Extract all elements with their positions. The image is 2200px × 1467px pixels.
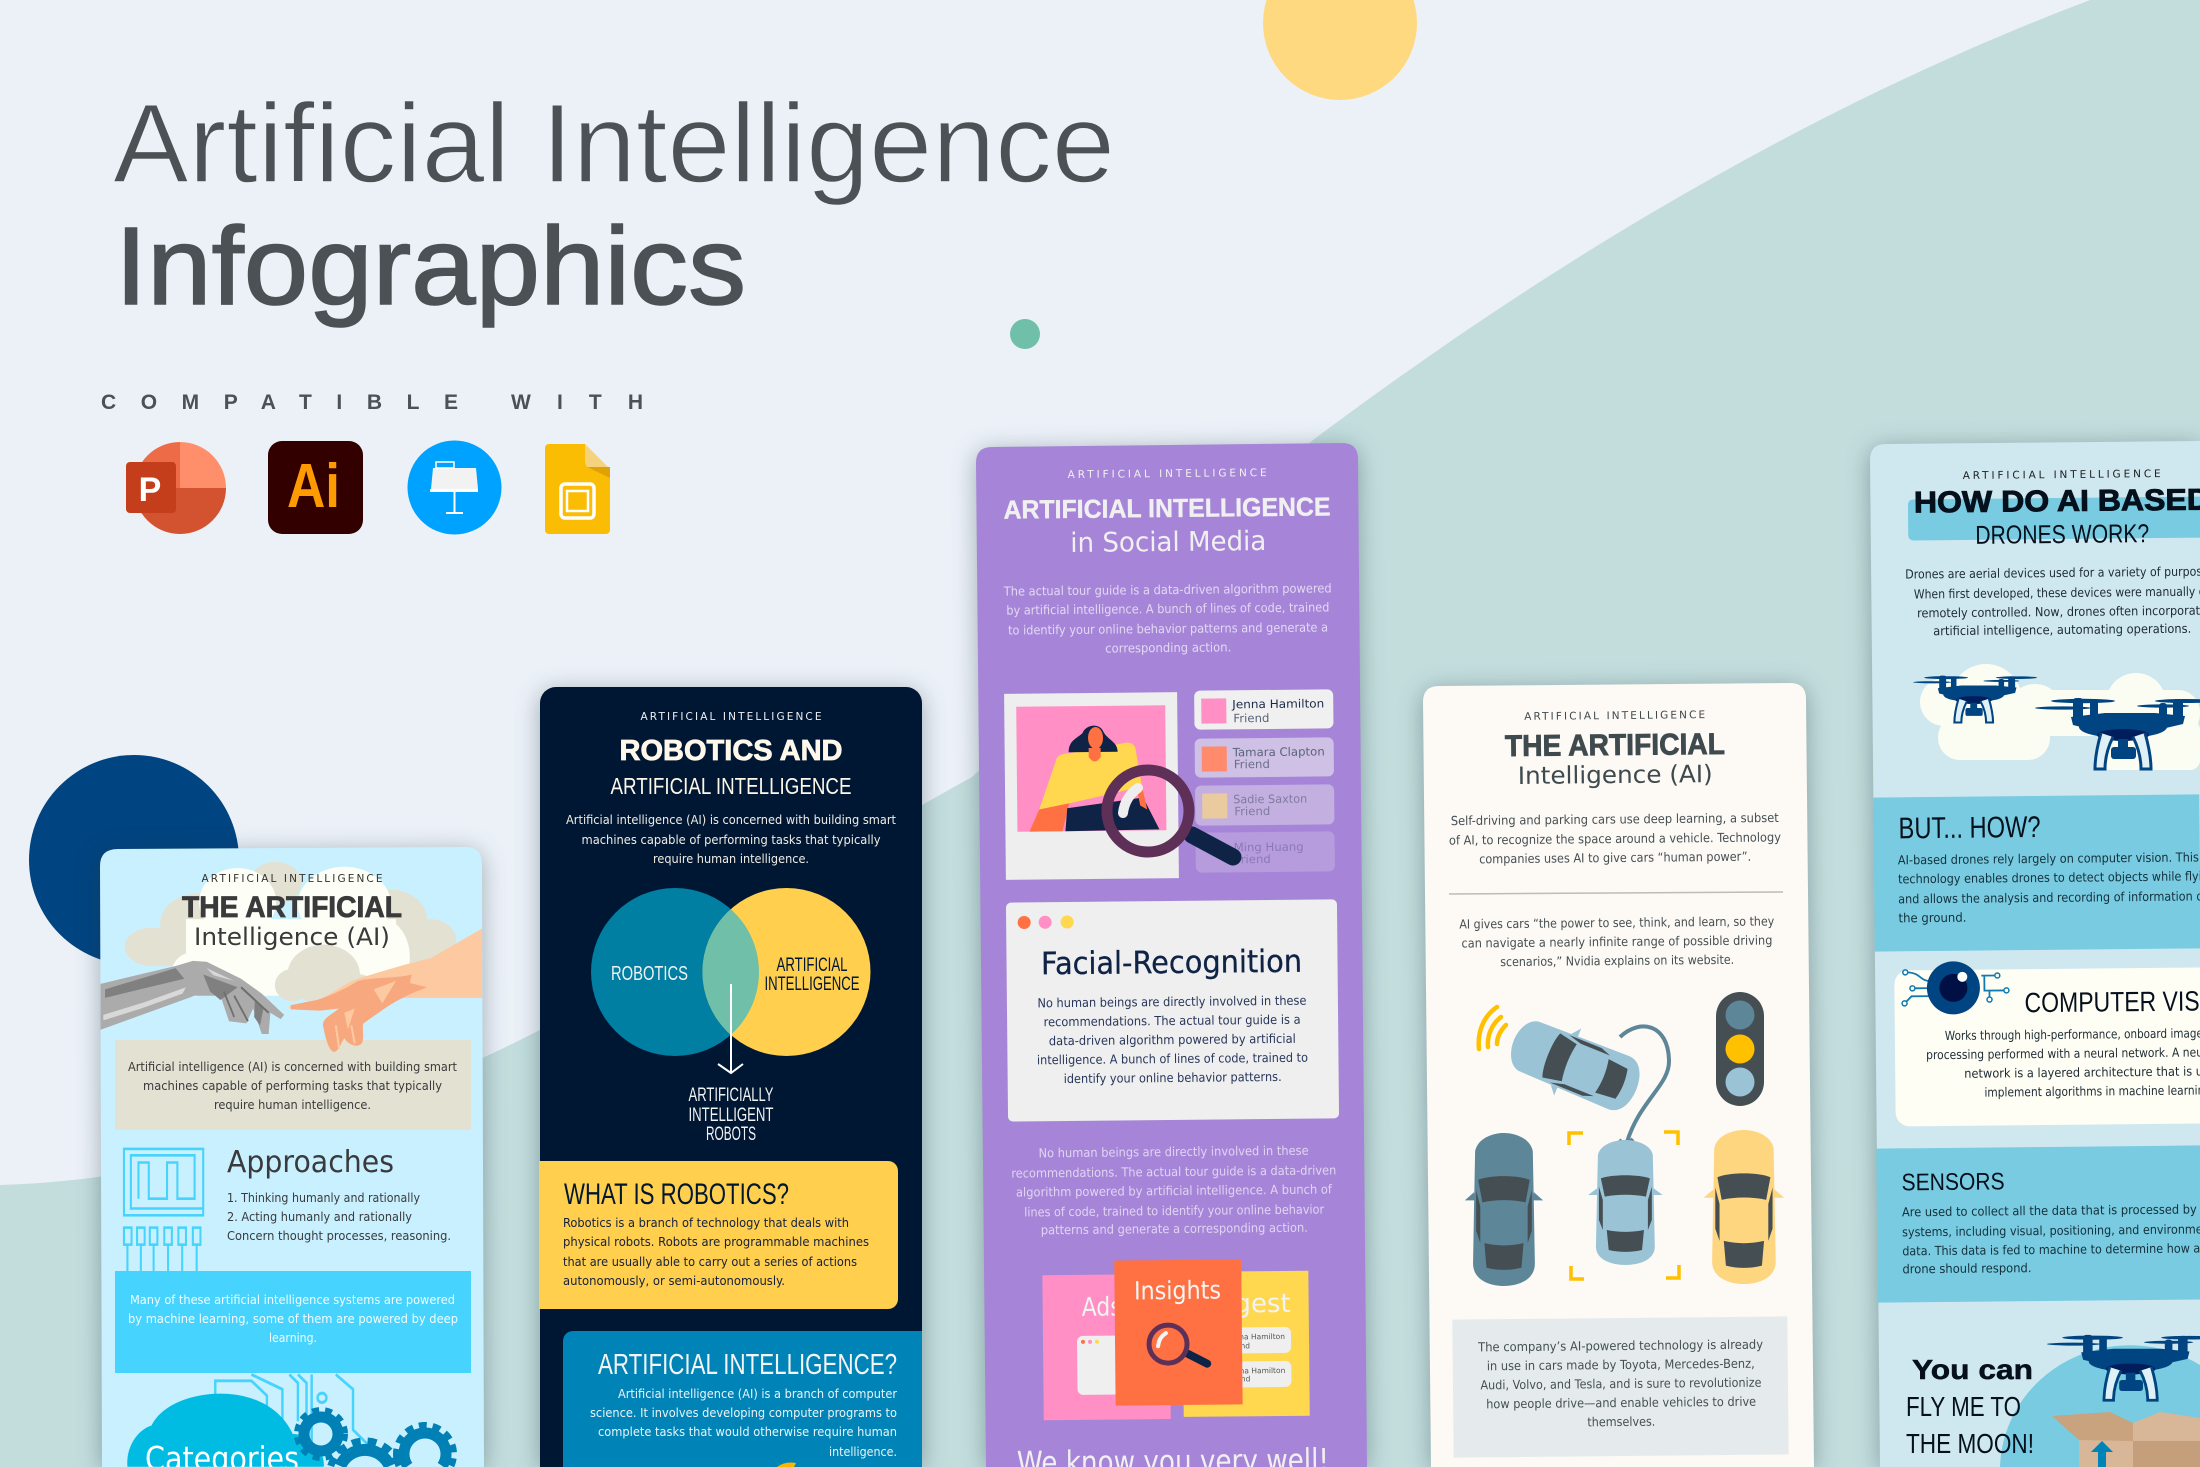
yellow box: what is robotics: [539, 1161, 898, 1309]
venn result label: [688, 1085, 774, 1145]
info box: in use in cars made by Toyota, Mercedes-Benz,: [1487, 1356, 1755, 1373]
facial recognition window: intelligence. A bunch of lines of code, trained to: [1037, 1050, 1308, 1067]
parking brackets: [1569, 1132, 1679, 1279]
header: [1003, 466, 1331, 560]
title: [113, 81, 1115, 328]
intro paragraph: require human intelligence.: [653, 851, 809, 866]
heading: ROBOTICS AND: [620, 735, 842, 767]
second paragraph: [1011, 1142, 1337, 1238]
compatible with label: COMPATIBLE: [101, 391, 458, 414]
blue callout: by machine learning, some of them are powered by deep: [128, 1311, 458, 1326]
second paragraph: can navigate a nearly infinite range of possible driving: [1461, 932, 1773, 951]
band: but how: the ground.: [1898, 910, 1967, 925]
second paragraph: algorithm powered by artificial intelligence. A bunch of: [1016, 1181, 1333, 1200]
approaches list: 1. Thinking humanly and rationally: [227, 1190, 421, 1205]
card: suggest: Suggest: [1185, 1289, 1291, 1320]
venn result label: ROBOTS: [706, 1124, 756, 1145]
venn diagram: ROBOTICS: [611, 963, 688, 985]
friend row: Ming Huang: Friend: [1235, 852, 1271, 866]
intro paragraph: [1003, 580, 1332, 657]
curved arrow: [1619, 1026, 1669, 1146]
intro paragraph: [566, 812, 896, 866]
band: but how: [1873, 794, 2200, 952]
title: Infographics: [115, 205, 746, 328]
info box: [1452, 1316, 1789, 1458]
blue box: artificial intelligence: complete tasks that would otherwise require human: [598, 1424, 897, 1439]
icon: Illustrator: [268, 441, 363, 534]
facial recognition window: recommendations. The actual tour guide is a: [1044, 1012, 1301, 1029]
blue box: artificial intelligence: [563, 1331, 922, 1467]
blue callout: [115, 1271, 471, 1373]
illustration: photo card: [1004, 692, 1179, 880]
card: suggest: [1182, 1271, 1310, 1417]
icon: Illustrator: Ai: [287, 452, 340, 521]
panel: the artificial intelligence (hands): [100, 847, 484, 1467]
header: ARTIFICIAL INTELLIGENCE: [1524, 709, 1705, 723]
eyebrow: ARTIFICIAL INTELLIGENCE: [640, 711, 822, 723]
header: [1505, 709, 1725, 790]
blue callout: Many of these artificial intelligence systems are powered: [130, 1292, 455, 1307]
decoration: green dot: [1010, 319, 1040, 349]
bottom section blue blob: [2000, 1345, 2200, 1467]
compatible with label: WITH: [511, 391, 643, 414]
header: [1908, 468, 2200, 551]
friend row: Sadie Saxton: Friend: [1234, 804, 1270, 818]
header: HOW DO AI BASED: [1914, 484, 2200, 519]
illustration: yellow car: [1704, 1130, 1784, 1284]
intro paragraph: The actual tour guide is a data-driven algorithm powered: [1003, 580, 1332, 599]
yellow box: what is robotics: physical robots. Robots are programmable machines: [563, 1234, 869, 1249]
icon: PowerPoint: P: [139, 471, 161, 509]
friend row: Jenna Hamilton: [1194, 689, 1333, 730]
closing text: FLY ME TO: [1906, 1391, 2021, 1422]
facial recognition window: [1006, 899, 1339, 1122]
description box: require human intelligence.: [214, 1097, 371, 1112]
info box: Audi, Volvo, and Tesla, and is sure to revolutionize: [1480, 1375, 1762, 1392]
eyebrow: ARTIFICIAL INTELLIGENCE: [202, 873, 382, 885]
friend row: Tamara Clapton: Tamara Clapton: [1232, 744, 1325, 759]
intro paragraph: [1905, 563, 2200, 639]
heading: [610, 735, 852, 799]
yellow box: what is robotics: that are usually able to carry out a series of actions: [563, 1254, 857, 1269]
second paragraph: [1459, 913, 1775, 970]
description box: Artificial intelligence (AI) is concerned with building smart: [128, 1059, 457, 1074]
decoration: yellow circle: [1263, 0, 1417, 100]
blue box: artificial intelligence: intelligence.: [829, 1444, 897, 1459]
panel: artificial intelligence in social media: [976, 443, 1367, 1467]
second paragraph: lines of code, trained to identify your online behavior: [1024, 1202, 1325, 1219]
facial recognition window: identify your online behavior patterns.: [1064, 1069, 1282, 1086]
compatible with label: [101, 391, 643, 414]
venn result label: ARTIFICIALLY: [688, 1085, 774, 1106]
approaches list: 2. Acting humanly and rationally: [227, 1209, 413, 1224]
intro paragraph: of AI, to recognize the space around a vehicle. Technology: [1449, 829, 1782, 848]
friend row: Tamara Clapton: [1195, 737, 1334, 778]
band: sensors: drone should respond.: [1902, 1260, 2032, 1276]
closing text: You can: [1912, 1354, 2033, 1385]
approaches heading: Approaches: [227, 1145, 394, 1180]
heading: ARTIFICIAL INTELLIGENCE: [610, 773, 852, 799]
info box: The company’s AI-powered technology is already: [1477, 1337, 1764, 1354]
friend rows: [1194, 689, 1335, 873]
venn diagram: [591, 888, 870, 1056]
illustration: clouds: [1920, 664, 2200, 770]
intro paragraph: to identify your online behavior patterns and generate a: [1008, 619, 1328, 638]
approaches list: Concern thought processes, reasoning.: [227, 1228, 451, 1243]
facial recognition window: Facial-Recognition: [1041, 944, 1302, 982]
description box: machines capable of performing tasks that typically: [143, 1078, 443, 1093]
heading: THE ARTIFICIAL: [182, 891, 402, 924]
illustration: clouds: [125, 862, 456, 1004]
friend row: Tamara Clapton: Friend: [1234, 757, 1270, 771]
header: Intelligence (AI): [1518, 760, 1713, 790]
white box: computer vision: [1894, 959, 2200, 1126]
intro paragraph: machines capable of performing tasks that typically: [582, 832, 881, 847]
illustration: circuits: [215, 1374, 379, 1465]
venn diagram: INTELLIGENCE: [764, 974, 860, 995]
blue box: artificial intelligence: ARTIFICIAL INTELLIGENCE?: [598, 1349, 897, 1381]
intro paragraph: companies uses AI to give cars “human power”.: [1479, 849, 1751, 866]
intro paragraph: Self-driving and parking cars use deep learning, a subset: [1451, 810, 1779, 828]
illustration: large drone: [2035, 698, 2200, 769]
second paragraph: scenarios,” Nvidia explains on its website.: [1500, 952, 1734, 969]
illustration: parked blue car: [1588, 1140, 1663, 1265]
icon: circuit chip: [124, 1149, 203, 1271]
illustration: package box: [2052, 1412, 2200, 1467]
card: suggest: Friend: [1227, 1374, 1251, 1384]
header: ARTIFICIAL INTELLIGENCE: [1003, 491, 1331, 525]
header: THE ARTIFICIAL: [1505, 728, 1725, 763]
icon: circuit eye: [1902, 961, 2009, 1015]
icon: Keynote: [408, 440, 502, 534]
arrow: [718, 984, 743, 1073]
friend row: Jenna Hamilton: Friend: [1233, 711, 1269, 725]
panel: how do AI based drones work: [1870, 441, 2200, 1467]
band: sensors: [1876, 1145, 2200, 1303]
friend row: Jenna Hamilton: Jenna Hamilton: [1231, 696, 1324, 711]
yellow box: what is robotics: autonomously, or semi-autonomously.: [563, 1273, 785, 1288]
header: ARTIFICIAL INTELLIGENCE: [1963, 468, 2161, 482]
illustration: small drone: [1913, 676, 2037, 723]
decoration: navy circle: [29, 755, 239, 965]
card: insights: Insights: [1134, 1276, 1221, 1305]
illustration: blue cloud: [127, 1394, 324, 1467]
intro paragraph: by artificial intelligence. A bunch of lines of code, trained: [1006, 599, 1329, 618]
header: DRONES WORK?: [1975, 518, 2149, 550]
friend row: Sadie Saxton: Sadie Saxton: [1233, 792, 1307, 806]
facial recognition window: data-driven algorithm powered by artificial: [1049, 1031, 1296, 1048]
description box: [115, 1040, 471, 1130]
friend row: Sadie Saxton: [1195, 784, 1334, 826]
facial recognition window: No human beings are directly involved in these: [1037, 993, 1307, 1010]
card: ads: [1042, 1274, 1171, 1420]
illustration: robot arm: [101, 961, 284, 1034]
blue box: artificial intelligence: Artificial intelligence (AI) is a branch of computer: [618, 1386, 898, 1401]
icon: magnifying glass: [1107, 770, 1233, 857]
header: in Social Media: [1070, 526, 1266, 559]
second paragraph: No human beings are directly involved in these: [1039, 1143, 1309, 1160]
icon: gears: [297, 1410, 454, 1466]
yellow box: what is robotics: Robotics is a branch of technology that deals with: [563, 1215, 849, 1230]
icon: PowerPoint: [126, 442, 226, 534]
icon: signal arcs: [1479, 1007, 1506, 1049]
info box: themselves.: [1587, 1414, 1655, 1429]
intro paragraph: corresponding action.: [1105, 639, 1231, 656]
closing text: THE MOON!: [1906, 1428, 2034, 1459]
panel: the artificial intelligence (cars): [1423, 683, 1814, 1467]
info box: how people drive—and enable vehicles to drive: [1486, 1394, 1756, 1411]
heading: [182, 891, 402, 951]
header: ARTIFICIAL INTELLIGENCE: [1068, 467, 1267, 481]
intro paragraph: [1449, 810, 1782, 867]
illustration: moving car: [1500, 1007, 1650, 1123]
approaches list: [227, 1190, 451, 1243]
blue box: artificial intelligence: science. It involves developing computer programs to: [590, 1405, 897, 1420]
illustration: delivery drone: [2047, 1335, 2200, 1400]
cards: ads, suggest, insights: [1042, 1259, 1310, 1420]
panel: robotics and artificial intelligence: [539, 687, 922, 1467]
blue callout: learning.: [269, 1330, 317, 1345]
intro paragraph: Artificial intelligence (AI) is concerned with building smart: [566, 812, 896, 827]
card: ads: Ads: [1082, 1293, 1122, 1323]
title: Artificial Intelligence: [113, 81, 1115, 206]
icon: Google Slides: [545, 444, 610, 534]
closing text: [1906, 1354, 2034, 1459]
band: sensors: SENSORS: [1901, 1168, 2005, 1196]
second paragraph: AI gives cars “the power to see, think, and learn, so they: [1459, 913, 1775, 932]
heading: Intelligence (AI): [194, 923, 390, 951]
card: suggest: Jenna Hamilton: [1227, 1332, 1285, 1342]
illustration: human hand: [289, 929, 482, 1052]
card: insights: [1114, 1259, 1243, 1406]
card: suggest: Friend: [1227, 1341, 1250, 1351]
second paragraph: patterns and generate a corresponding action.: [1041, 1220, 1308, 1237]
venn diagram: ARTIFICIAL: [776, 955, 848, 976]
card: suggest: Jenna Hamilton: [1227, 1366, 1286, 1376]
friend row: Ming Huang: Ming Huang: [1234, 840, 1304, 854]
band: but how: BUT... HOW?: [1898, 811, 2041, 845]
venn result label: INTELLIGENT: [688, 1105, 774, 1126]
second paragraph: recommendations. The actual tour guide is a data-driven: [1011, 1162, 1336, 1181]
icon: traffic light: [1716, 992, 1764, 1106]
yellow box: what is robotics: WHAT IS ROBOTICS?: [564, 1178, 789, 1211]
friend row: Ming Huang: [1196, 831, 1335, 873]
illustration: teal car: [1465, 1133, 1543, 1286]
